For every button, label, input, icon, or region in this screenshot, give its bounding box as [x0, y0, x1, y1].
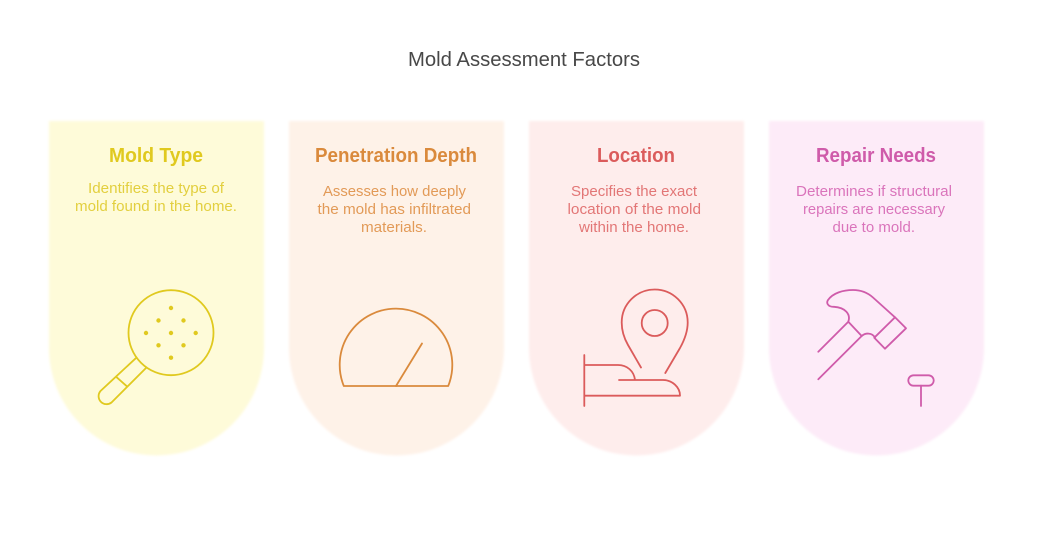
icon: gauge: [340, 309, 452, 386]
text: Mold Type description: [75, 180, 237, 215]
text: Penetration Depth description: [318, 183, 471, 236]
text: Location description: [568, 183, 701, 236]
heading: Repair Needs: Repair Needs: [816, 145, 936, 167]
text: Location description: location of the mold: [568, 201, 701, 218]
heading: Mold Type: Mold Type: [109, 145, 203, 167]
heading: Location: Location: [597, 145, 675, 167]
text: Repair Needs description: due to mold.: [832, 219, 915, 236]
text: Mold Type description: Identifies the type of: [88, 180, 225, 197]
panel: Mold Type: [49, 121, 264, 456]
text: Mold Type description: mold found in the home.: [75, 198, 237, 215]
icon: hand holding location pin: [584, 290, 688, 406]
text: Penetration Depth description: Assesses how deeply: [323, 183, 466, 200]
panel: Penetration Depth: [289, 121, 504, 456]
text: Location description: within the home.: [578, 219, 689, 236]
text: Penetration Depth description: the mold has infiltrated: [318, 201, 471, 218]
heading: Penetration Depth: Penetration Depth: [315, 145, 477, 167]
text: Penetration Depth description: materials.: [361, 219, 427, 236]
text: Repair Needs description: repairs are necessary: [803, 201, 945, 218]
panel: Repair Needs: [769, 121, 984, 456]
icon: hammer and nail: [818, 290, 934, 406]
title: Mold Assessment Factors: [408, 49, 640, 71]
text: Location description: Specifies the exact: [571, 183, 698, 200]
text: Repair Needs description: [796, 183, 952, 236]
text: Repair Needs description: Determines if structural: [796, 183, 952, 200]
panel: Location: [529, 121, 744, 456]
icon: magnifying glass: [99, 290, 214, 404]
